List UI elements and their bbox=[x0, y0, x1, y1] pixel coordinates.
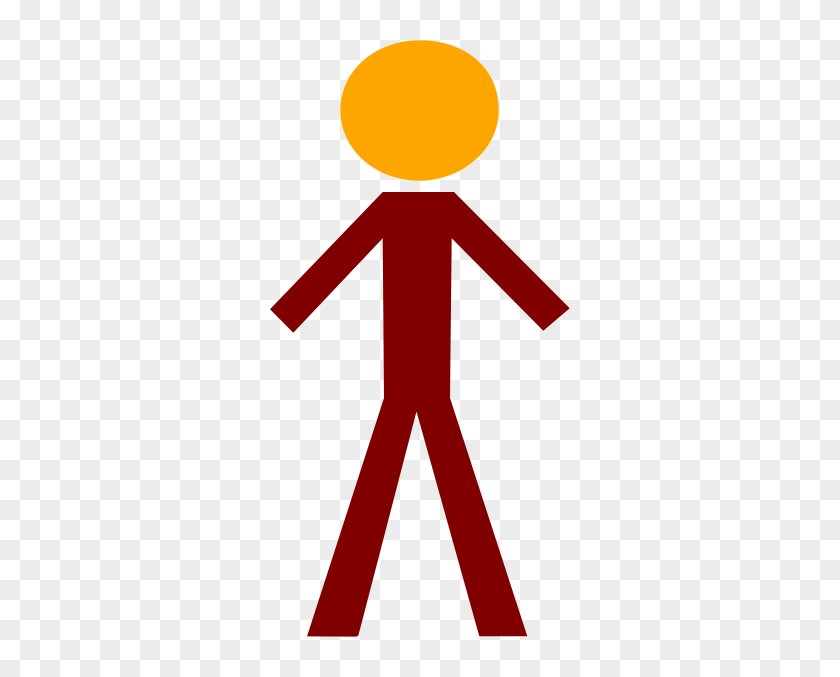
body bbox=[270, 192, 570, 637]
head bbox=[340, 40, 499, 181]
